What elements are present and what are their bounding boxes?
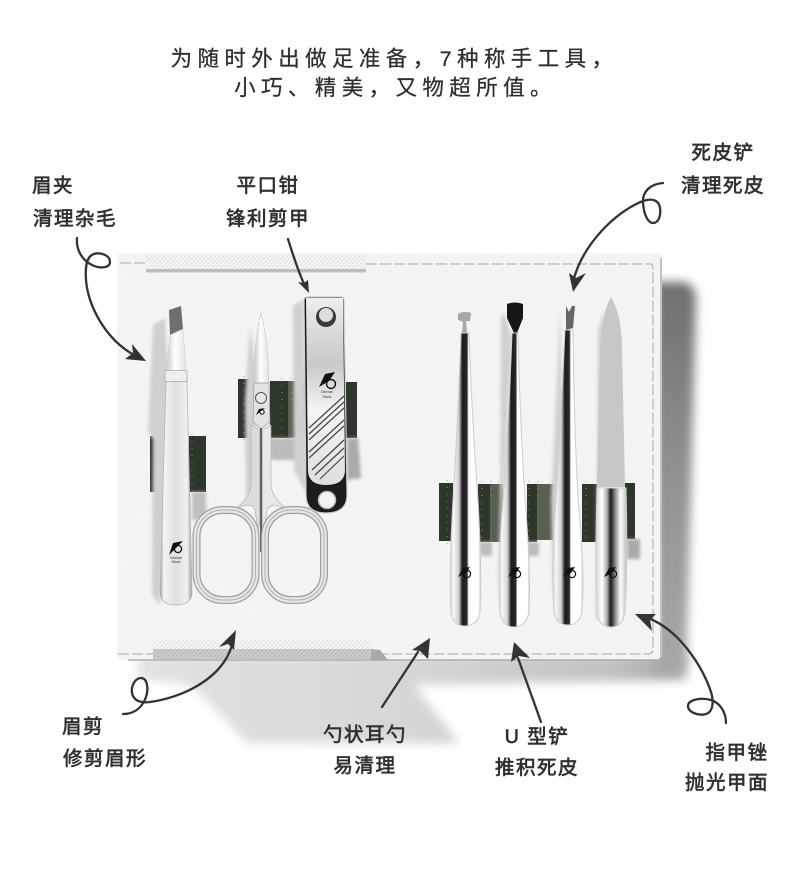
label: spoon ear pick (323, 724, 407, 777)
tool: nail file (596, 297, 627, 627)
title: 小巧、精美，又物超所值。 (234, 76, 557, 100)
label: cuticle shovel (681, 142, 765, 197)
logo: German Stone clipper: Stone (323, 395, 332, 399)
label: cuticle shovel: 清理死皮 (681, 175, 765, 197)
tool: nail scissors (196, 313, 324, 600)
bottom strap band (153, 640, 388, 660)
tool: spoon ear pick (499, 302, 530, 627)
label: U pusher: 推积死皮 (495, 757, 579, 779)
logo: German Stone small (256, 408, 265, 415)
logo (508, 567, 521, 578)
label: brow scissors: 修剪眉形 (63, 748, 147, 770)
logo (458, 567, 471, 578)
tool: curette with small hook (450, 312, 481, 626)
right shank (262, 425, 287, 530)
arrow: file (635, 614, 726, 723)
stitching (118, 263, 653, 654)
title: 为随时外出做足准备，7种称手工具， (171, 47, 618, 71)
arrow: clipper (288, 239, 309, 293)
label: U pusher (495, 726, 579, 779)
logo: German Stone clipper: German (321, 390, 333, 394)
label: brow scissors: 眉剪 (62, 716, 104, 738)
logo: German Stone: Stone (172, 560, 181, 564)
left shank (235, 425, 260, 530)
tool: nail clipper (304, 297, 347, 513)
arrow: spoon (382, 638, 430, 707)
label: U pusher: U 型铲 (505, 726, 569, 748)
logo (604, 567, 617, 578)
top strap band (146, 255, 366, 272)
arrow: cuticle shovel (569, 183, 663, 292)
logo (563, 567, 576, 578)
clipper stripes (309, 396, 344, 479)
label: cuticle shovel: 死皮铲 (691, 142, 755, 164)
tool: eyebrow tweezers (160, 306, 192, 605)
label: nail file (685, 742, 769, 794)
label: eyebrow tweezers: 清理杂毛 (33, 208, 117, 230)
label: brow scissors (62, 716, 147, 770)
label: eyebrow tweezers (32, 175, 117, 230)
label: spoon ear pick: 易清理 (333, 755, 397, 777)
arrow: tweezers (77, 238, 146, 361)
right finger ring (265, 510, 324, 600)
label: eyebrow tweezers: 眉夹 (32, 175, 74, 197)
tool: U cuticle pusher (553, 306, 583, 625)
logo: German Stone: German (170, 556, 182, 560)
label: nail file: 抛光甲面 (685, 772, 769, 794)
logo: German Stone clipper (319, 372, 336, 399)
arrow: U pusher (511, 642, 541, 722)
left finger ring (196, 510, 256, 600)
label: flat clipper: 平口钳 (236, 175, 300, 197)
label: flat clipper (226, 175, 310, 230)
case shadow (138, 282, 696, 743)
arrow: brow scissors (123, 630, 236, 714)
title (171, 47, 618, 100)
label: nail file: 指甲锉 (705, 742, 769, 764)
label: flat clipper: 锋利剪甲 (226, 208, 310, 230)
green elastic straps (150, 376, 635, 544)
label: spoon ear pick: 勺状耳勺 (323, 724, 407, 746)
logo: German Stone (169, 541, 183, 564)
tool shadows (148, 300, 640, 620)
leather case (117, 253, 662, 660)
